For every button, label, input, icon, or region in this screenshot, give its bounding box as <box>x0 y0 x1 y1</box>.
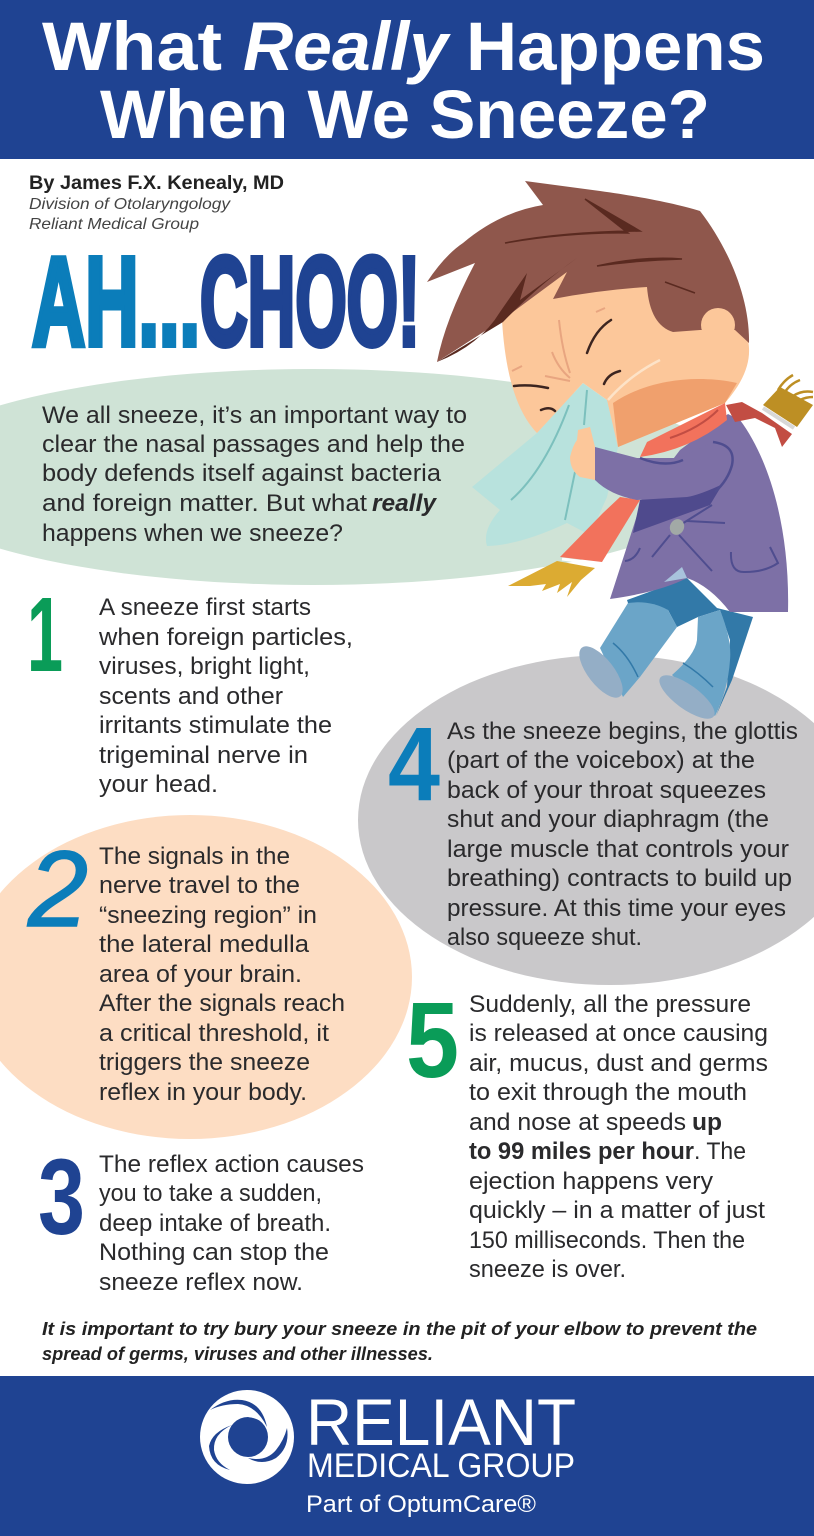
step 5 text <box>469 991 768 1283</box>
step 5 text: sneeze is over. <box>469 1256 626 1283</box>
logo wordmark: MEDICAL GROUP <box>307 1447 575 1485</box>
inner jacket <box>633 480 725 533</box>
step 2 text <box>99 843 345 1106</box>
coat details <box>625 505 778 572</box>
step 2 text: area of your brain. <box>99 961 302 988</box>
heading: AH...CHOO!: CHOO! <box>200 231 420 372</box>
number 3: 3 <box>38 1136 85 1257</box>
step 5 text: air, mucus, dust and germs <box>469 1050 768 1077</box>
step 5 text: is released at once causing <box>469 1020 768 1047</box>
step 5 text: ejection happens very <box>469 1168 713 1195</box>
step 5 text: quickly – in a matter of just <box>469 1197 765 1224</box>
step 2 text: “sneezing region” in <box>99 902 317 929</box>
step 3 text: deep intake of breath. <box>99 1210 331 1237</box>
step 3 text <box>99 1151 364 1296</box>
number 1: 1 <box>27 576 63 694</box>
author byline: By James F.X. Kenealy, MD <box>29 173 284 194</box>
author byline: Division of Otolaryngology <box>29 196 231 213</box>
step 3 text: sneeze reflex now. <box>99 1269 303 1296</box>
title banner: What <box>42 8 222 85</box>
step 5 text: 150 milliseconds. Then the <box>469 1227 745 1254</box>
step 2 text: The signals in the <box>99 843 290 870</box>
ear <box>701 308 735 342</box>
step 4 text: pressure. At this time your eyes <box>447 895 786 922</box>
step 5 text: to 99 miles per hour <box>469 1138 694 1165</box>
step 1 text <box>98 594 353 798</box>
legs <box>600 602 677 697</box>
facial features <box>514 320 620 411</box>
step 4 text: shut and your diaphragm (the <box>447 806 769 833</box>
number 4: 4 <box>388 706 440 823</box>
intro text: clear the nasal passages and help the <box>42 431 465 458</box>
step 2 text: a critical threshold, it <box>99 1020 329 1047</box>
footer banner <box>0 1376 814 1536</box>
neck scarf <box>640 403 727 457</box>
step 4 text <box>447 718 798 951</box>
step 4 text: large muscle that controls your <box>447 836 789 863</box>
panel: step 4 ellipse <box>358 655 814 985</box>
step 4 text: (part of the voicebox) at the <box>447 747 755 774</box>
step 1 text: trigeminal nerve in <box>99 742 308 769</box>
step 1 text: A sneeze first starts <box>99 594 311 621</box>
step 5 text: to exit through the mouth <box>469 1079 747 1106</box>
step 5 text: and nose at speeds <box>469 1109 686 1136</box>
step 5 text: Suddenly, all the pressure <box>469 991 751 1018</box>
step 1 text: scents and other <box>99 683 283 710</box>
hand <box>570 427 595 480</box>
scarf tail <box>560 497 640 562</box>
step 2 text: After the signals reach <box>99 990 345 1017</box>
tissue <box>472 383 618 546</box>
hair <box>427 181 749 362</box>
closing note: It is important to try bury your sneeze in the pit of your elbow to prevent the <box>42 1319 757 1339</box>
face <box>502 240 749 447</box>
panel: step 2 ellipse <box>0 815 412 1139</box>
intro text: happens when we sneeze? <box>42 520 343 547</box>
step 1 text: viruses, bright light, <box>99 653 310 680</box>
logo wordmark: Part of OptumCare® <box>306 1491 536 1518</box>
sleeve <box>595 442 733 500</box>
intro text: We all sneeze, it’s an important way to <box>42 402 467 429</box>
step 3 text: Nothing can stop the <box>99 1239 329 1266</box>
step 2 text: the lateral medulla <box>99 931 310 958</box>
dark pants <box>627 578 753 716</box>
title banner <box>0 0 814 159</box>
character: sneezing boy <box>427 181 813 726</box>
title banner: Happens <box>466 8 765 85</box>
step 4 text: also squeeze shut. <box>447 924 642 951</box>
intro text: body defends itself against bacteria <box>42 460 442 487</box>
title banner: Really <box>243 8 452 85</box>
step 4 text: breathing) contracts to build up <box>447 865 792 892</box>
button <box>667 517 687 537</box>
icon: Reliant swirl logo <box>200 1390 294 1484</box>
shoes <box>572 640 630 704</box>
intro text: really <box>372 490 438 517</box>
author byline: Reliant Medical Group <box>29 216 199 233</box>
scarf fringe <box>508 561 595 597</box>
cheek shadow <box>613 379 737 447</box>
hair shadows <box>437 258 577 362</box>
logo wordmark: RELIANT <box>306 1385 576 1459</box>
step 3 text: The reflex action causes <box>99 1151 364 1178</box>
step 1 text: your head. <box>99 771 218 798</box>
closing note <box>42 1319 757 1364</box>
step 2 text: triggers the sneeze <box>99 1049 310 1076</box>
panel: intro ellipse <box>0 369 731 585</box>
step 2 text: reflex in your body. <box>99 1079 307 1106</box>
step 1 text: irritants stimulate the <box>99 712 332 739</box>
step 3 text: you to take a sudden, <box>99 1180 322 1207</box>
step 4 text: As the sneeze begins, the glottis <box>447 718 798 745</box>
heading: AH...CHOO!: AH... <box>32 231 200 372</box>
intro text: and foreign matter. But what <box>42 490 367 517</box>
author byline <box>29 173 284 233</box>
closing note: spread of germs, viruses and other illnesses. <box>42 1344 433 1364</box>
title banner: When We Sneeze? <box>100 76 710 153</box>
number 2: 2 <box>27 828 88 949</box>
number 5: 5 <box>406 979 459 1100</box>
coat <box>610 414 788 612</box>
step 4 text: back of your throat squeezes <box>447 777 766 804</box>
step 5 text: . The <box>694 1138 746 1165</box>
scarf flying end <box>726 402 792 447</box>
step 5 text: up <box>692 1109 722 1136</box>
logo wordmark <box>306 1385 576 1518</box>
step 1 text: when foreign particles, <box>98 624 353 651</box>
intro text <box>42 402 467 547</box>
step 2 text: nerve travel to the <box>99 872 300 899</box>
